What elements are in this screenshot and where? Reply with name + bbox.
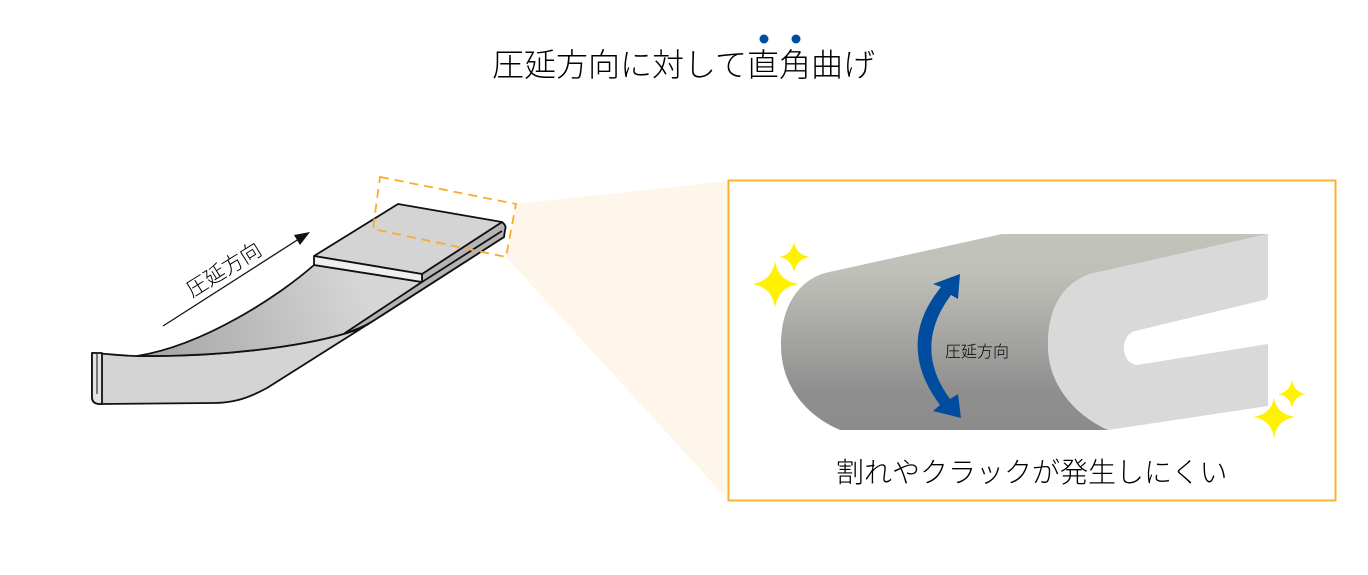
zoom beam — [506, 181, 728, 500]
rolling direction arrow — [163, 232, 310, 326]
underside of bend — [137, 265, 422, 356]
inner rolling direction label: 圧延方向 — [945, 343, 1009, 361]
bent edge curved face — [781, 234, 1268, 430]
title — [492, 34, 875, 83]
rim crease line — [422, 231, 502, 282]
side rim — [345, 222, 506, 333]
dashed focus area — [373, 177, 516, 257]
bent sheet illustration — [92, 204, 506, 404]
panel: detail — [728, 180, 1336, 500]
title text: 圧延方向に対して直角曲げ — [492, 47, 875, 83]
blue double arrow — [918, 274, 961, 418]
panel border — [728, 180, 1336, 500]
sparkles: upper left — [752, 241, 810, 308]
fold line — [96, 354, 98, 394]
caption: 割れやクラックが発生しにくい — [836, 457, 1227, 488]
sparkles: lower right — [1253, 380, 1306, 439]
emphasis dots — [760, 34, 800, 44]
plate top face — [314, 204, 502, 274]
bent edge front face — [1048, 234, 1268, 430]
folded end — [92, 353, 102, 404]
rolling direction label: 圧延方向 — [182, 238, 266, 302]
lower band — [92, 237, 504, 404]
plate front edge — [314, 256, 422, 282]
